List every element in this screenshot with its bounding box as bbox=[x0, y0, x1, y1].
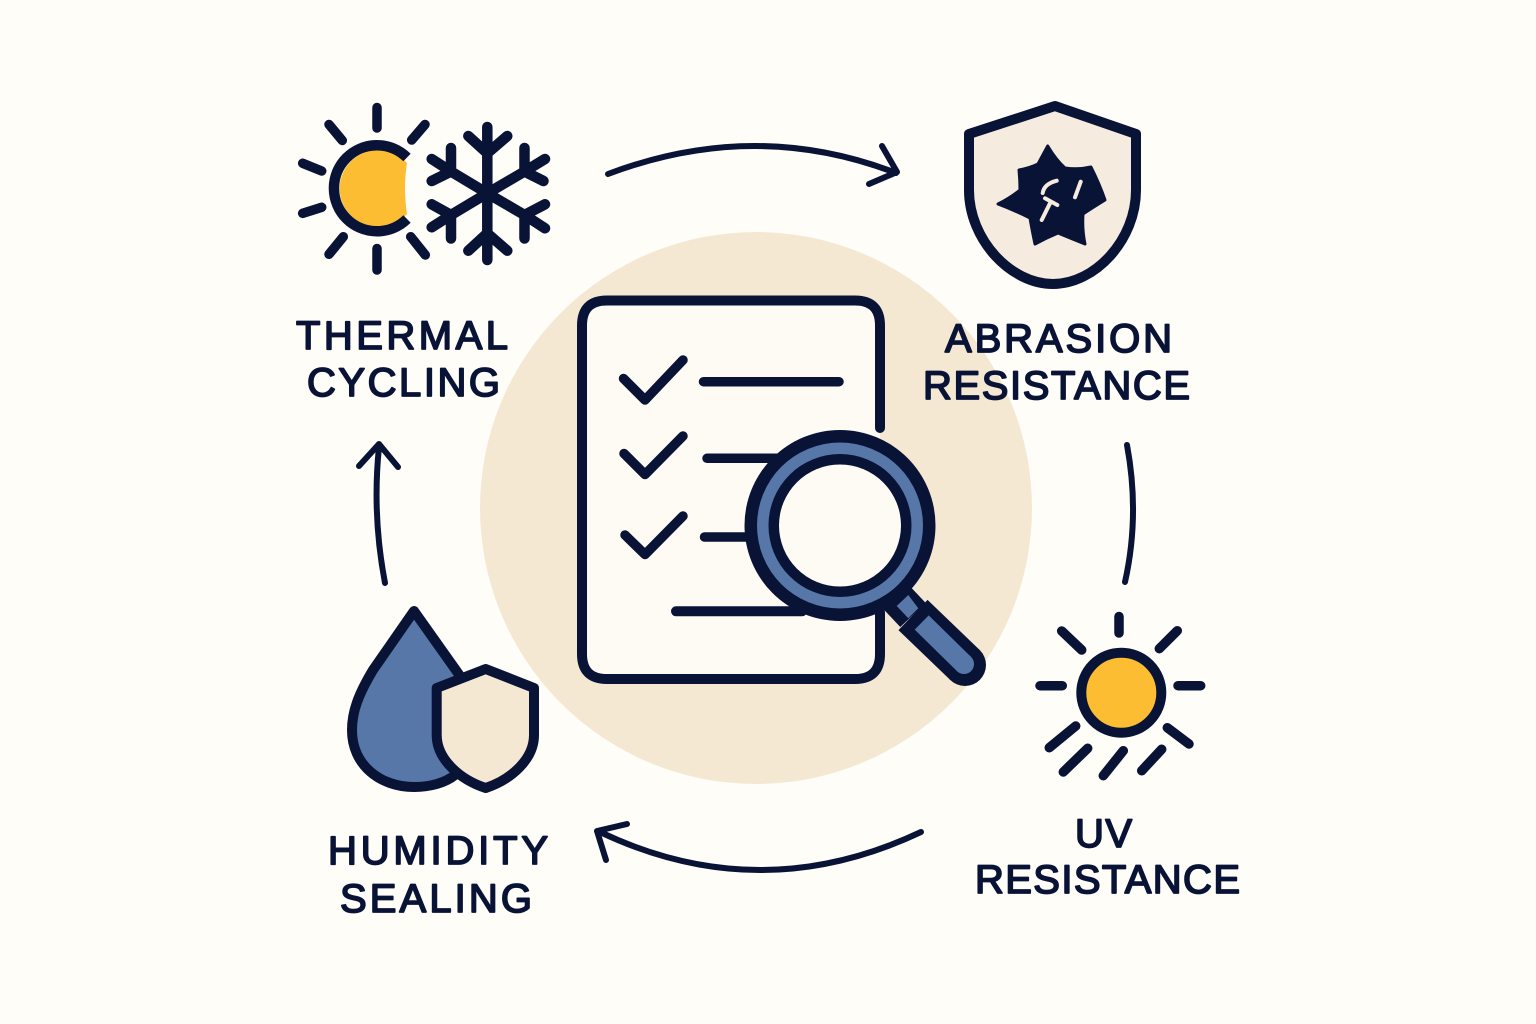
water drop bbox=[352, 611, 470, 787]
icon: UV sun bbox=[1040, 616, 1201, 776]
scratch marks bbox=[1042, 181, 1081, 220]
label: abrasion resistance: RESISTANCE bbox=[923, 364, 1190, 408]
icon: water drop with shield bbox=[352, 611, 534, 788]
label: abrasion resistance: ABRASION bbox=[945, 317, 1172, 361]
checklist item 3 bbox=[625, 516, 752, 554]
checklist item 2 bbox=[624, 436, 785, 474]
label: abrasion resistance bbox=[923, 317, 1190, 408]
magnifier lens bbox=[744, 430, 936, 621]
label: thermal cycling bbox=[296, 314, 508, 405]
label: UV resistance: RESISTANCE bbox=[975, 858, 1240, 902]
sun disc bbox=[1081, 653, 1161, 733]
label: humidity sealing: HUMIDITY bbox=[328, 829, 548, 873]
small shield bbox=[437, 669, 534, 788]
label: UV resistance: UV bbox=[1075, 812, 1132, 856]
icon: sun and snowflake (thermal cycling) bbox=[303, 108, 545, 270]
half sun bbox=[303, 108, 425, 270]
central icon: magnifying glass bbox=[744, 430, 986, 686]
label: humidity sealing: SEALING bbox=[340, 877, 532, 921]
magnifier handle bbox=[880, 580, 986, 686]
arrow: humidity sealing to thermal cycling bbox=[359, 444, 398, 583]
label: thermal cycling: THERMAL bbox=[296, 314, 508, 358]
arrow: abrasion resistance to UV resistance bbox=[1125, 445, 1133, 582]
checklist item 1 bbox=[624, 360, 839, 400]
arrow: UV resistance to humidity sealing bbox=[597, 824, 921, 870]
arrow: thermal cycling to abrasion resistance bbox=[608, 146, 897, 184]
icon: shield with abrasion mark bbox=[969, 106, 1136, 284]
label: UV resistance bbox=[975, 812, 1240, 902]
checklist line 4 bbox=[676, 606, 802, 616]
snowflake bbox=[432, 127, 545, 260]
sun rays bbox=[1040, 616, 1201, 776]
central icon: checklist document bbox=[582, 300, 880, 679]
central beige circle bbox=[480, 232, 1032, 784]
document page bbox=[582, 300, 880, 679]
label: humidity sealing bbox=[328, 829, 548, 921]
label: thermal cycling: CYCLING bbox=[307, 361, 500, 405]
shield outline bbox=[969, 106, 1136, 284]
abrasion blob bbox=[998, 146, 1105, 244]
